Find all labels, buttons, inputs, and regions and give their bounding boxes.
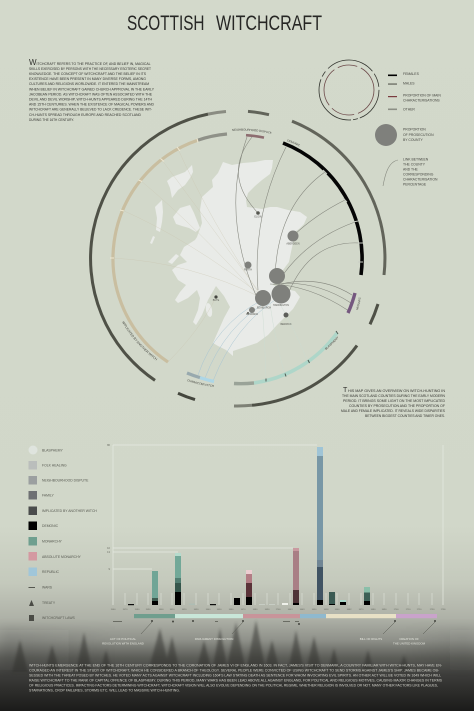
legend keys: PROPORTION OF MAIN	[403, 94, 441, 98]
arc labels: IMPLICATED BY ANOTHER WITCH	[122, 321, 158, 360]
year labels: 1560	[111, 609, 116, 611]
axis values	[107, 443, 111, 571]
intro text block: DURING THE 16TH CENTURY.	[29, 117, 74, 122]
segment: folk healing	[198, 134, 227, 140]
year labels: 1680	[371, 609, 376, 611]
legend sample ring	[319, 60, 379, 120]
key: treaty	[29, 600, 56, 606]
key: witchcraft laws	[29, 615, 76, 621]
legend county circle	[375, 124, 397, 146]
year labels: 1620	[182, 609, 187, 611]
timeline event labels: REVOLUTION WITH ENGLAND	[102, 642, 144, 646]
intro text block: ITCHCRAFT REFERS TO THE PRACTICE OF, AND BELIEF IN, MAGICAL	[36, 61, 151, 66]
arc labels	[122, 128, 361, 387]
bar 3	[234, 598, 240, 605]
intro text block: WHEN BELIEF IN WITCHCRAFT GAINED CHURCH APPROVAL IN THE EARLY	[29, 86, 154, 91]
map note text block: BETWEEN BIGGEST COUNTIES AND TINIER ONES.	[365, 413, 445, 418]
year labels: 1690	[382, 609, 387, 611]
timeline events and connectors	[113, 620, 436, 634]
intro text block: WITCHCRAFT ARE GENERALLY BELIEVED TO LACK CREDENCE. THESE WIT-	[29, 107, 153, 112]
segment: blasphemy	[254, 333, 337, 383]
key: monarchy	[28, 537, 63, 546]
timeline event labels: BILL OF RIGHTS	[360, 637, 382, 641]
key: implicated by another witch	[28, 506, 97, 515]
chart axes and guides	[113, 445, 443, 605]
year labels: 1650	[312, 609, 317, 611]
legend county label: PROPORTION	[403, 128, 426, 132]
bottom text block: WITCH-HUNTS EMERGENCE AT THE END OF THE 16TH CENTURY CORRESPONDS TO THE CORONATION OF JAMES VI OF ENGLAND IN 1603. IN FACT, JAMES'S VISIT TO DENMARK, A COUNTRY FAMILIAR WITH WITCH-HUNTS, MAY HAVE EN-	[29, 662, 443, 667]
links: mint lower	[262, 304, 308, 380]
bar 2	[175, 553, 181, 605]
legend link label: LINK BETWEEN	[403, 158, 429, 162]
legend county label: BY COUNTY	[403, 138, 423, 142]
year labels: 1610	[170, 609, 175, 611]
legend keys	[388, 72, 441, 112]
intro text block: EXISTENCE HAVE BEEN PRESENT IN MANY DIVERSE FORMS, AMONG	[29, 76, 146, 81]
year labels: 1670	[359, 609, 364, 611]
legend keys: CHARACTERISATIONS	[403, 99, 440, 103]
key: family	[28, 491, 55, 500]
key: absolute monarchy: ABSOLUTE MONARCHY	[42, 555, 82, 559]
legend keys: OTHER	[403, 108, 415, 112]
arc labels: DEMONIC	[287, 139, 300, 146]
timeline event labels	[102, 637, 426, 646]
axis values: 86	[107, 443, 111, 447]
year labels: 1710	[406, 609, 411, 611]
key: blasphemy: BLASPHEMY	[42, 448, 63, 452]
year labels: 1662	[347, 609, 352, 611]
title: SCOTTISH	[127, 12, 204, 35]
bottom text block: COURAGED AN INTEREST IN THE STUDY OF WITCHCRAFT, WHICH HE CONSIDERED A BRANCH OF THEOLOGY. SEVERAL PEOPLE WERE CONVICTED OF USING WITCHCRAFT TO SEND STORMS AGAINST JAMES'S SHIP. JAMES BECAME OB-	[29, 667, 440, 672]
links: dark neighbourhood and demonic	[236, 137, 360, 311]
key: monarchy: MONARCHY	[42, 540, 63, 544]
outer ring	[91, 111, 385, 406]
legend county label: OF PROSECUTION	[403, 133, 434, 137]
intro text block: AND 15TH CENTURIES. WHEN THE EXISTENCE OF MAGICAL POWERS AND	[29, 102, 154, 107]
bar 1	[152, 571, 158, 605]
year labels: 1643	[288, 609, 293, 611]
key: republic	[28, 568, 60, 576]
legend county label	[403, 128, 434, 142]
key: treaty: TREATY	[42, 601, 56, 605]
map note text block: COUNTIES BY PROSECUTION AND THE PROPORTION OF	[349, 403, 446, 408]
segment: republic	[187, 373, 200, 378]
legend link label: CHARACTERISATION	[403, 178, 438, 182]
year labels: 1650	[217, 609, 222, 611]
bottom text block: RAISE WITCHCRAFT TO THE RANK OF CAPITAL OFFENCE OF BLASPHEMY. DURING THIS PERIOD, MANY WARS HAS BEEN LEAD ABOVE ALL AGAINST ENGLAND, FOR POLITICAL AND RELIGIOUS MOTIVES, CAUSING MAJOR CHANGES IN TERMS	[29, 677, 442, 682]
timeline event labels: CREATION OF	[399, 637, 419, 641]
year labels: 1700	[394, 609, 399, 611]
year labels: 1720	[417, 609, 422, 611]
county links	[112, 137, 360, 381]
arc labels: CHARACTER PITCH	[187, 379, 214, 387]
county names: RENFREW	[246, 313, 259, 316]
timeline event labels: ACT OF POLITICAL	[110, 637, 136, 641]
intro text block: W	[29, 58, 37, 67]
county names: BUTE	[213, 299, 220, 302]
links: pale tan and mint	[112, 149, 262, 362]
year labels: 1658	[324, 609, 329, 611]
year labels: 1590	[146, 609, 151, 611]
year labels: 1736	[441, 609, 446, 611]
chart legend	[28, 446, 97, 621]
year labels: 1730	[430, 609, 435, 611]
title: WITCHCRAFT	[216, 12, 322, 35]
bar 7	[329, 592, 335, 605]
year labels: 1580	[135, 609, 140, 611]
year labels: 1690	[265, 609, 270, 611]
year labels: 1660	[335, 609, 340, 611]
axis values: 13	[107, 550, 111, 554]
map note text block: T	[343, 387, 348, 394]
bar 9	[364, 587, 370, 605]
year labels: 1670	[241, 609, 246, 611]
county names: HADDINGTON	[273, 304, 289, 307]
intro text block: DEVIL AND DEVIL WORSHIP, WITCH-HUNTS APPEARED DURING THE 14TH	[29, 96, 152, 102]
arc labels: NEIGHBOURHOOD DISPUTE	[232, 128, 272, 134]
title	[127, 12, 322, 35]
key: demonic: DEMONIC	[42, 524, 59, 528]
county circles	[214, 211, 298, 318]
county names: EDINBURGH	[257, 306, 271, 310]
legend link label: AND THE	[403, 168, 419, 172]
year labels	[111, 609, 446, 611]
arc labels: BLASPHEMY	[324, 336, 338, 350]
county names: BERWICK	[280, 323, 292, 326]
legend link label: PERCENTAGE	[403, 182, 427, 186]
political timeline	[134, 614, 437, 618]
arc labels: MONARCHY	[356, 297, 361, 310]
county names: ELGIN	[254, 216, 262, 218]
year labels: 1680	[253, 609, 258, 611]
key: absolute monarchy	[28, 552, 82, 560]
map note text block: MALE AND FEMALE IMPLICATED. IT REVEALS WIDE DISPARITIES	[341, 408, 445, 413]
bar 8	[340, 600, 346, 605]
intro text block: CH-HUNTS SPREAD THROUGH EUROPE AND REACHED SCOTLAND	[29, 112, 141, 117]
county names: PERTH	[244, 268, 252, 272]
links: blue Edinburgh	[198, 298, 278, 381]
bar chart	[107, 443, 446, 611]
key: folk healing: FOLK HEALING	[42, 464, 67, 468]
key: family: FAMILY	[42, 494, 55, 498]
key: implicated by another witch: IMPLICATED BY ANOTHER WITCH	[42, 509, 97, 513]
year labels: 1649	[300, 609, 305, 611]
axis values: 9	[109, 567, 111, 571]
intro text block	[29, 58, 154, 122]
map note text block: PERIOD. IT BRINGS SOME LIGHT ON THE MOST IMPLICATED	[343, 398, 445, 403]
legend link curve	[383, 160, 398, 186]
segment: demonic	[283, 143, 362, 275]
legend link label	[403, 158, 438, 186]
key: wars	[28, 586, 53, 590]
segment: neighbourhood dispute	[246, 135, 264, 138]
map note text block: THE MAIN SCOTLAND COUNTIES DURING THE EARLY MODERN	[342, 393, 445, 398]
misty forest	[0, 620, 474, 672]
bar 6	[317, 447, 323, 605]
key: folk healing	[28, 461, 67, 470]
bottom text block: STARVATIONS, CROP FAILURES, STORMS ETC. WILL LEAD TO MASSIVE WITCH-HUNTING.	[29, 687, 180, 692]
intro text block: JACOBEAN PERIOD. AS WITCHCRAFT WAS OFTEN ASSOCIATED WITH THE	[29, 91, 152, 96]
key: republic: REPUBLIC	[42, 570, 60, 574]
key: demonic	[28, 522, 59, 530]
intro text block: CULTURES AND RELIGIONS WORLDWIDE. IT ENTERED THE MAINSTREAM	[29, 81, 149, 86]
county names: ABERDEEN	[286, 242, 300, 246]
bar 5	[293, 548, 299, 605]
ring tick marks	[110, 138, 363, 382]
key: neighbourhood dispute	[28, 476, 89, 484]
county names	[213, 216, 300, 326]
year labels: 1630	[194, 609, 199, 611]
legend link label: THE COUNTY	[403, 162, 426, 166]
year labels: 1660	[229, 609, 234, 611]
timeline event labels: PARLIAMENT DISSOLUTION	[195, 637, 233, 641]
year labels: 1700	[276, 609, 281, 611]
timeline event labels: THE UNITED KINGDOM	[393, 642, 426, 646]
legend keys: FEMALES	[403, 72, 420, 76]
legend link label: CORRESPONDING	[403, 172, 434, 176]
key: wars: WARS	[42, 586, 53, 590]
key: neighbourhood dispute: NEIGHBOURHOOD DISPUTE	[42, 478, 89, 482]
year labels: 1640	[206, 609, 211, 611]
intro text block: SKILLS EXERCISED BY PERSONS WITH THE NECESSARY ESOTERIC SECRET	[29, 66, 152, 71]
key: witchcraft laws: WITCHCRAFT LAWS	[42, 616, 76, 620]
segment: family	[348, 293, 355, 313]
intro text block: KNOWLEDGE. THE CONCEPT OF WITCHCRAFT AND THE BELIEF IN ITS	[29, 71, 146, 76]
year labels: 1570	[123, 609, 128, 611]
legend: ring diagram key	[319, 60, 441, 186]
map note text block	[341, 387, 446, 418]
map of Scotland	[150, 160, 307, 356]
legend keys: MALES	[403, 82, 415, 86]
map note text block: HIS MAP GIVES AN OVERVIEW ON WITCH-HUNTING IN	[348, 388, 445, 393]
bar 4	[246, 570, 252, 605]
bottom text block	[29, 662, 443, 692]
axis values: 10	[107, 546, 111, 550]
small bars	[128, 603, 288, 605]
inner ring	[113, 134, 362, 384]
year labels: 1600	[159, 609, 164, 611]
key: blasphemy	[28, 446, 63, 454]
